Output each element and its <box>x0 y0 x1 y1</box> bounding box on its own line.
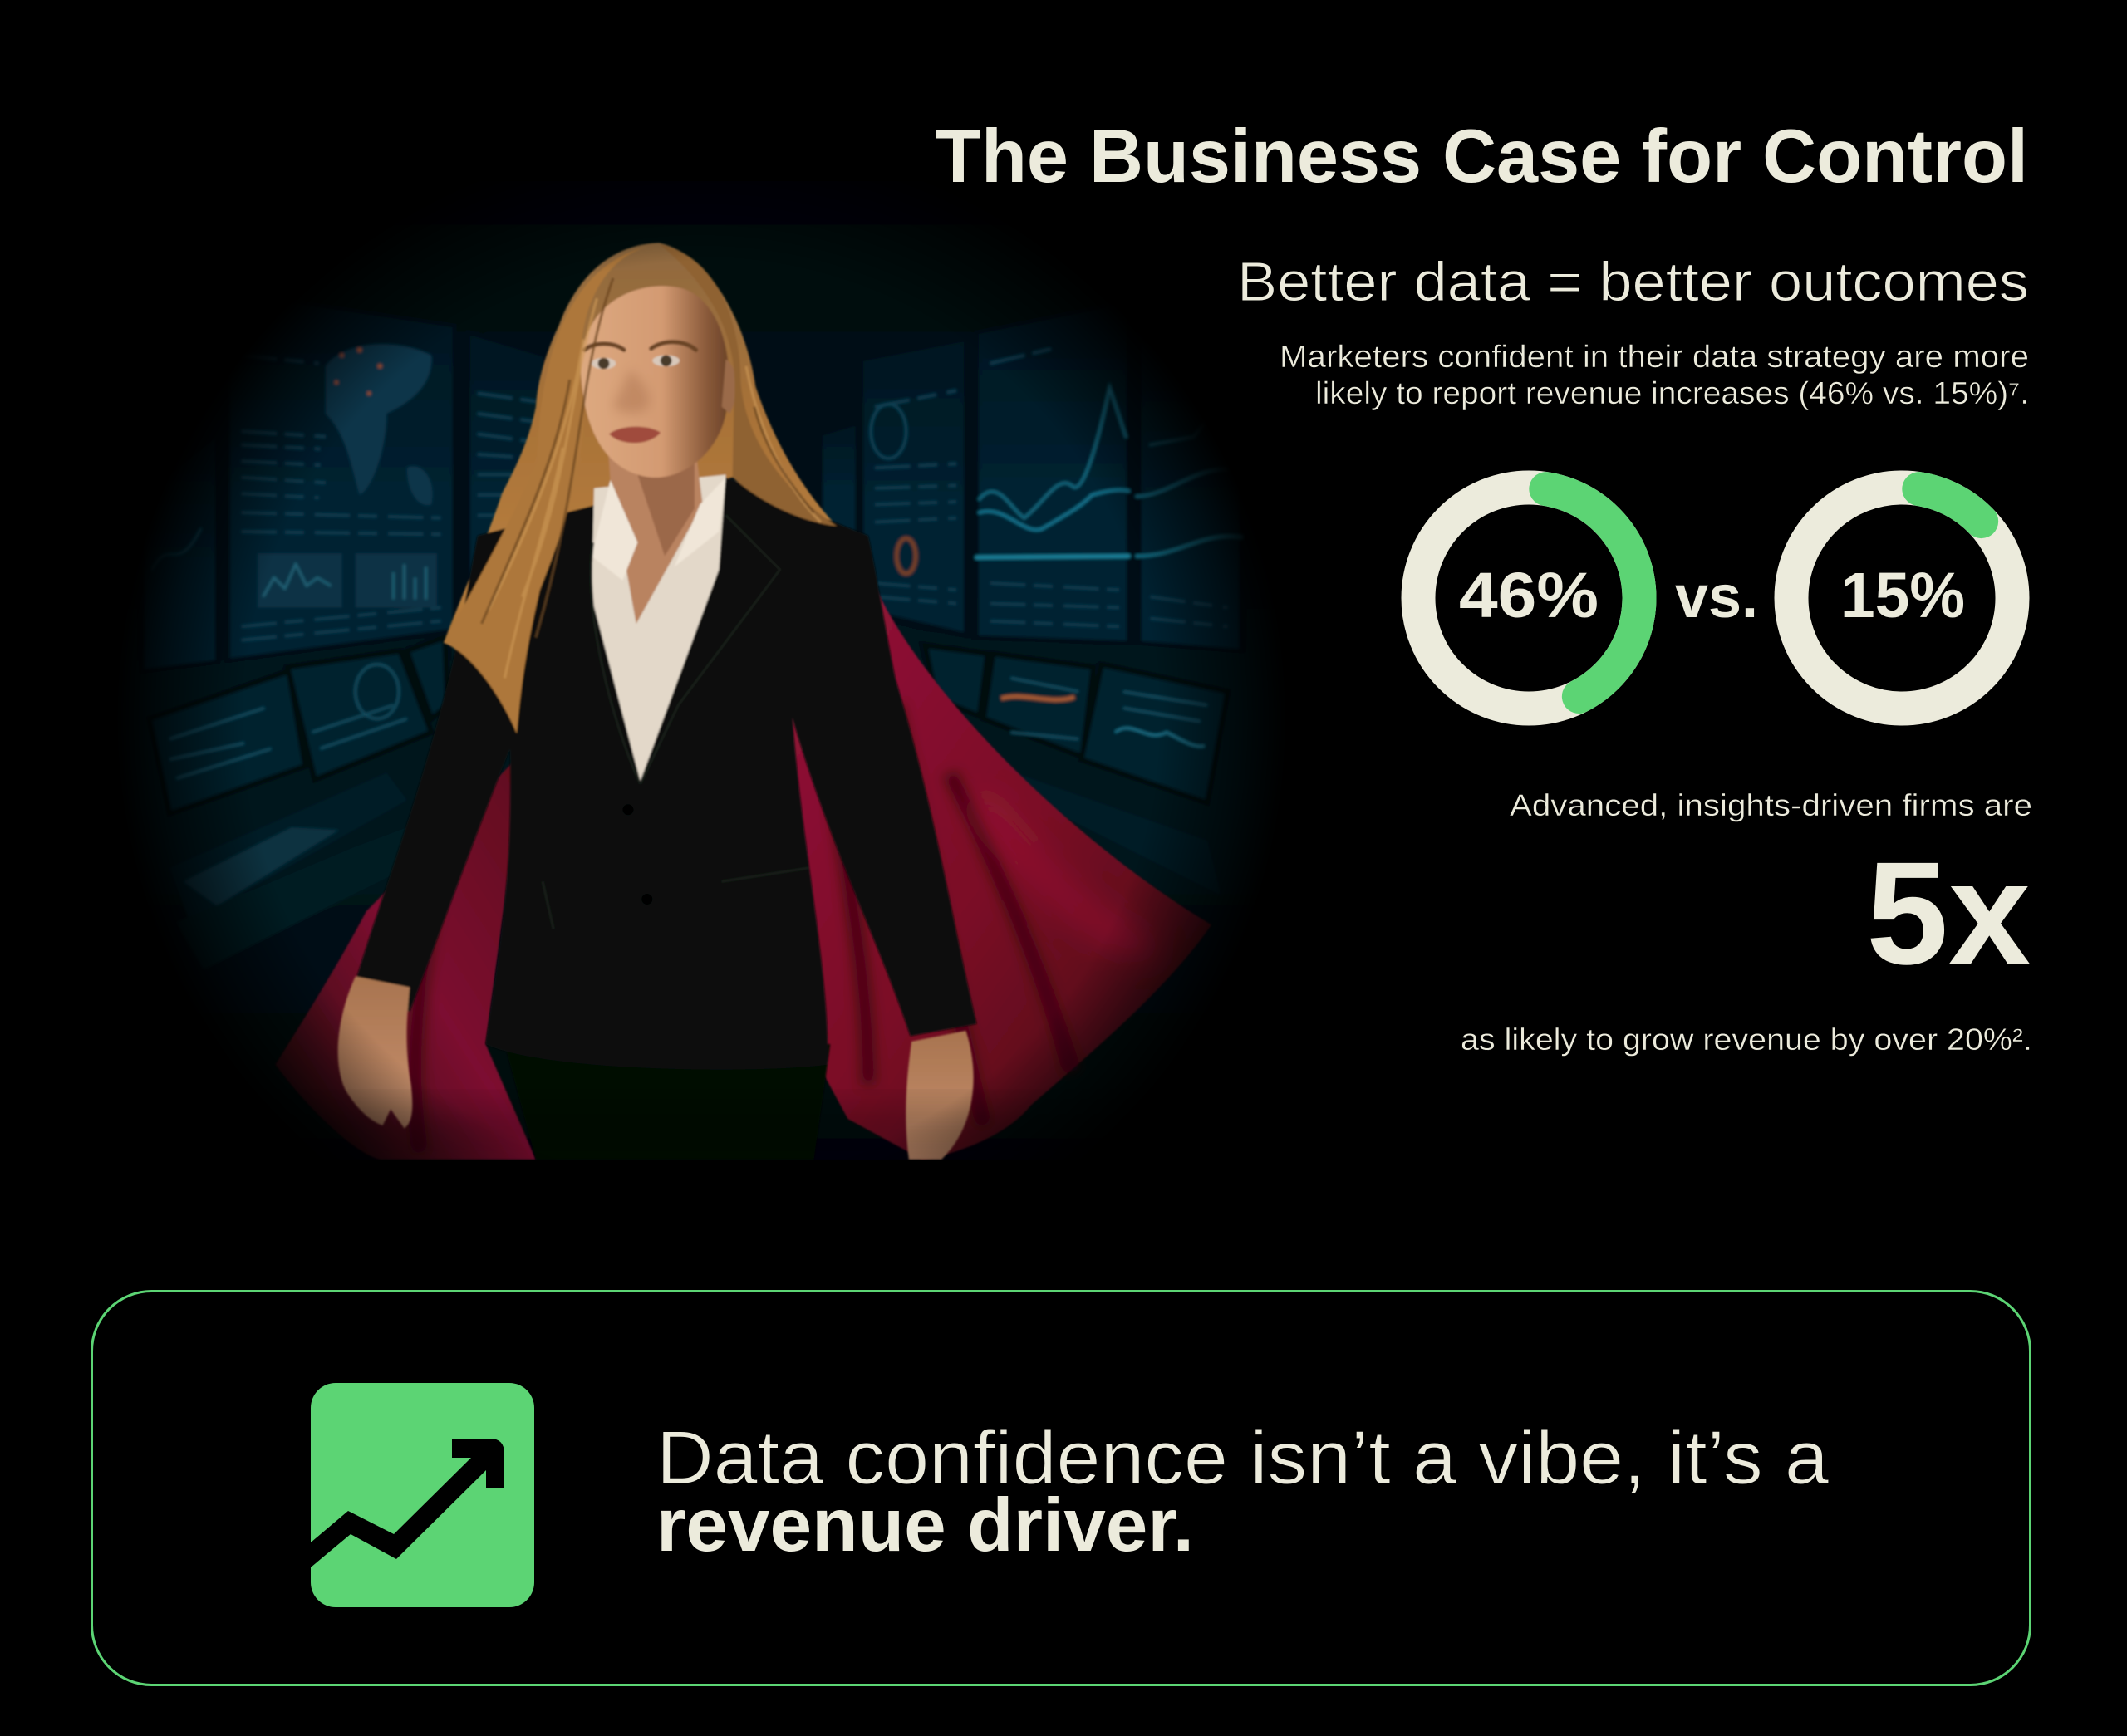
neck <box>607 441 703 624</box>
back hair <box>444 243 837 733</box>
lapels <box>543 515 808 929</box>
callout text <box>656 1416 1829 1567</box>
shirt <box>592 474 725 781</box>
trousers <box>504 1044 830 1160</box>
stat: 5x: 5x <box>1866 832 2031 995</box>
donut chart: 15%: 15% <box>1840 560 1965 631</box>
control room backdrop <box>145 214 1252 1160</box>
vs label: vs. <box>1675 564 1758 630</box>
stat follow-up: as likely to grow revenue by over 20%². <box>1461 1022 2032 1057</box>
callout panel <box>91 1291 2031 1685</box>
illustration: businesswoman with red cape in a data control room <box>145 214 1252 1160</box>
desk monitors <box>150 637 1228 814</box>
statement text <box>1280 340 2029 411</box>
data rows <box>242 347 1228 640</box>
hands <box>338 977 974 1160</box>
donut chart: 46%: 46% <box>1459 560 1599 631</box>
callout text: Data confidence isn’t a vibe, it’s a <box>656 1416 1829 1500</box>
face <box>581 286 729 478</box>
stat lead-in: Advanced, insights-driven firms are <box>1510 788 2032 822</box>
title: The Business Case for Control <box>936 115 2028 199</box>
subtitle: Better data = better outcomes <box>1237 251 2029 313</box>
donut chart: 15% <box>1776 472 2028 724</box>
statement text: Marketers confident in their data strategy are more <box>1280 340 2029 375</box>
statement text: likely to report revenue increases (46% vs. 15%)⁷. <box>1315 376 2029 411</box>
chart lines <box>152 388 1241 570</box>
map <box>326 344 432 505</box>
jacket <box>354 478 977 1070</box>
callout text: revenue driver. <box>656 1483 1194 1567</box>
collar <box>592 480 637 581</box>
woman <box>338 243 977 1160</box>
icon: trending up arrow <box>311 1383 534 1607</box>
lower darkening <box>352 1092 1024 1160</box>
donut chart: 46% <box>1402 472 1655 724</box>
red cape <box>275 586 1211 1160</box>
front hair strands <box>445 249 638 734</box>
